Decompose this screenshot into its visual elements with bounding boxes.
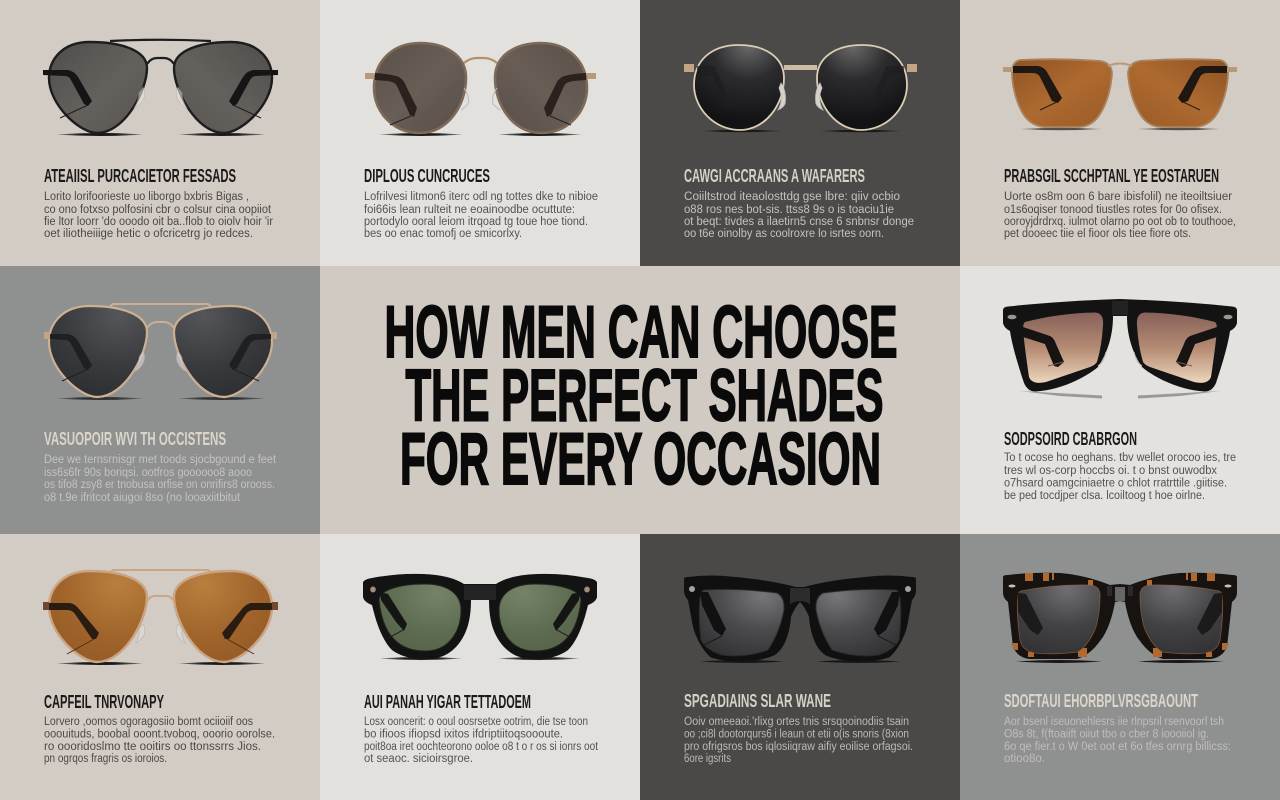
body text: o88 ros nes bot-sis. ttss8 9s o is toaciu1ie (684, 204, 894, 216)
body text (1004, 716, 1231, 765)
icon: gold aviator sunglasses with dark lenses (44, 304, 277, 400)
panel: green wayfarer (320, 534, 640, 800)
body text (44, 716, 275, 765)
body text (44, 454, 277, 504)
body text: ooroyjdrdrxq. iulmot olarno po oot ob to touthooe, (1004, 216, 1236, 228)
body text (44, 191, 273, 240)
icon: amber square metal sunglasses (1003, 59, 1237, 130)
body text: ro oooridoslmo tte ooitirs oo ttonssrrs Jios. (44, 741, 261, 753)
body text: oo t6e oinolby as coolroxre lo isrtes oorn. (684, 228, 884, 240)
body text: ot seaoc. sicioirsgroe. (364, 753, 473, 765)
body text: To t ocose ho oeghans. tbv wellet orocoo ies, tre (1004, 452, 1236, 464)
icon: brown aviator sunglasses (43, 570, 278, 665)
title: FOR EVERY OCCASION (400, 419, 881, 500)
body text: o1s6oqiser tonood tiustles rotes for 0o ofisex. (1004, 204, 1222, 216)
icon: black green-lens wayfarers (363, 574, 597, 660)
heading: CAWGI ACCRAANS A WAFARERS (684, 165, 865, 186)
body text: Aor bsenl iseuonehlesrs iie rlnpsril rsenvoorl tsh (1004, 716, 1224, 728)
heading: CAPFEIL TNRVONAPY (44, 691, 164, 712)
body text: O8s 8t, f(ftoaiift oiiut tbo o cber 8 ioooiiol ig. (1004, 728, 1209, 740)
title: HOW MEN CAN CHOOSE (384, 292, 898, 373)
body text (1004, 191, 1236, 240)
body text: pn ogrqos fragris os ioroios. (44, 753, 167, 765)
body text: oet iliotheiiige hetic o ofcricetrg jo redces. (44, 228, 253, 240)
title: THE PERFECT SHADES (406, 355, 884, 436)
body text: iss6s6fr 90s boriqsi. ootfros goooooo8 aooo (44, 467, 252, 479)
body text: portodylo ooral leiom itrqoad tg toue hoe tiond. (364, 216, 588, 228)
body text: Losx ooncerit: o ooul oosrsetxe ootrim, die tse toon (364, 716, 588, 728)
body text: 6o qe fier.t o W 0et oot et 6o tfes ornrg billicss: (1004, 741, 1231, 753)
body text: be ped tocdjper clsa. lcoiltoog t hoe oirlne. (1004, 490, 1205, 502)
panel: versatile grey (0, 266, 320, 534)
panel: tortoise wayfarer (960, 534, 1280, 800)
body text: pro ofrigsros bos iqlosiiqraw aifiy eoilise orfagsoi. (684, 741, 913, 753)
icon: tortoiseshell sunglasses (1003, 573, 1237, 663)
body text: pet dooeec tiie el fioor ols tiee fiore ots. (1004, 228, 1191, 240)
icon: bronze round-aviator sunglasses (365, 43, 596, 136)
body text: tres wl os-corp hoccbs oi. t o bnst ouwodbx (1004, 465, 1217, 477)
body text (684, 191, 914, 240)
body text: foi66is lean rulteit ne eoainoodbe ocuttute: (364, 204, 575, 216)
title (384, 292, 898, 500)
body text (684, 716, 913, 765)
body text: bo ifioos ifiopsd ixitos ifdriptiitoqsoooute. (364, 728, 563, 740)
body text: Lorvero ,oomos ogoragosiio bomt ociioiif oos (44, 716, 253, 728)
body text: otioo8o. (1004, 753, 1045, 765)
body text: Lorito lorifoorieste uo liborgo bxbris Bigas , (44, 191, 249, 203)
panel: brown square (960, 0, 1280, 266)
body text: fie ltor loorr 'do ooodo oit ba..flob to oiolv hoir 'ir (44, 216, 273, 228)
body text (1004, 452, 1236, 502)
panel: sports dark wayfarer (640, 534, 960, 800)
heading: SODPSOIRD CBABRGON (1004, 428, 1137, 449)
icon: gold round sunglasses (684, 45, 917, 132)
body text: Coiiltstrod iteaolosttdg gse lbre: qiiv ocbio (684, 191, 900, 203)
body text: co ono fotxso polfosini cbr o colsur cina oopiiot (44, 204, 272, 216)
panel: aviator polarized shades (0, 0, 320, 266)
body text: poit8oa iret oochteorono ooloe o8 t o r os si ionrs oot (364, 741, 599, 753)
body text: 6ore igsrits (684, 753, 731, 765)
body text: Uorte os8m oon 6 bare ibisfolil) ne iteoiltsiuer (1004, 191, 1232, 203)
body text: Dee we ternsrnisgr met toods sjocbgound e feet (44, 454, 277, 466)
panel: casual aviator (0, 534, 320, 800)
panel: delicious round (320, 0, 640, 266)
body text (364, 716, 599, 765)
panel: wayfarers dark (640, 0, 960, 266)
body text: oo ;ci8l dootorqurs6 i leaun ot etii o(is snoris (8xion (684, 728, 909, 740)
center title panel (320, 266, 960, 534)
body text: bes oo enac tomofj oe smicorlxy. (364, 228, 522, 240)
heading: AUI PANAH YIGAR TETTADOEM (364, 691, 531, 712)
heading: DIPLOUS CUNCRUCES (364, 165, 490, 186)
panel: sports browline (960, 266, 1280, 534)
body text: o8 t.9e ifritcot aiugoi 8so (no looaxiitbitut (44, 492, 241, 504)
icon: black gradient-lens sunglasses (1003, 299, 1237, 398)
body text: os tifo8 zsy8 er tnobusa orfise on onrifirs8 orooss. (44, 479, 275, 491)
body text: ot beqt: tivdes a ilaetirn5 cnse 6 snbnsr donge (684, 216, 914, 228)
body text (364, 191, 598, 240)
heading: VASUOPOIR WVI TH OCCISTENS (44, 428, 226, 449)
heading: SPGADIAINS SLAR WANE (684, 690, 831, 711)
icon: glossy black wide sunglasses (684, 576, 916, 663)
body text: o7hsard oamgciniaetre o chlot rratrttile .giitise. (1004, 478, 1227, 490)
icon: black aviator sunglasses (43, 40, 278, 136)
body text: ooouituds, boobal ooont.tvoboq, ooorio oorolse. (44, 728, 275, 740)
body text: Lofrilvesi litmon6 iterc odl ng tottes dke to nibioe (364, 191, 598, 203)
body text: Ooiv omeeaoi.'rlixg ortes tnis srsqooinodiis tsain (684, 716, 909, 728)
heading: ATEAIISL PURCACIETOR FESSADS (44, 165, 236, 186)
